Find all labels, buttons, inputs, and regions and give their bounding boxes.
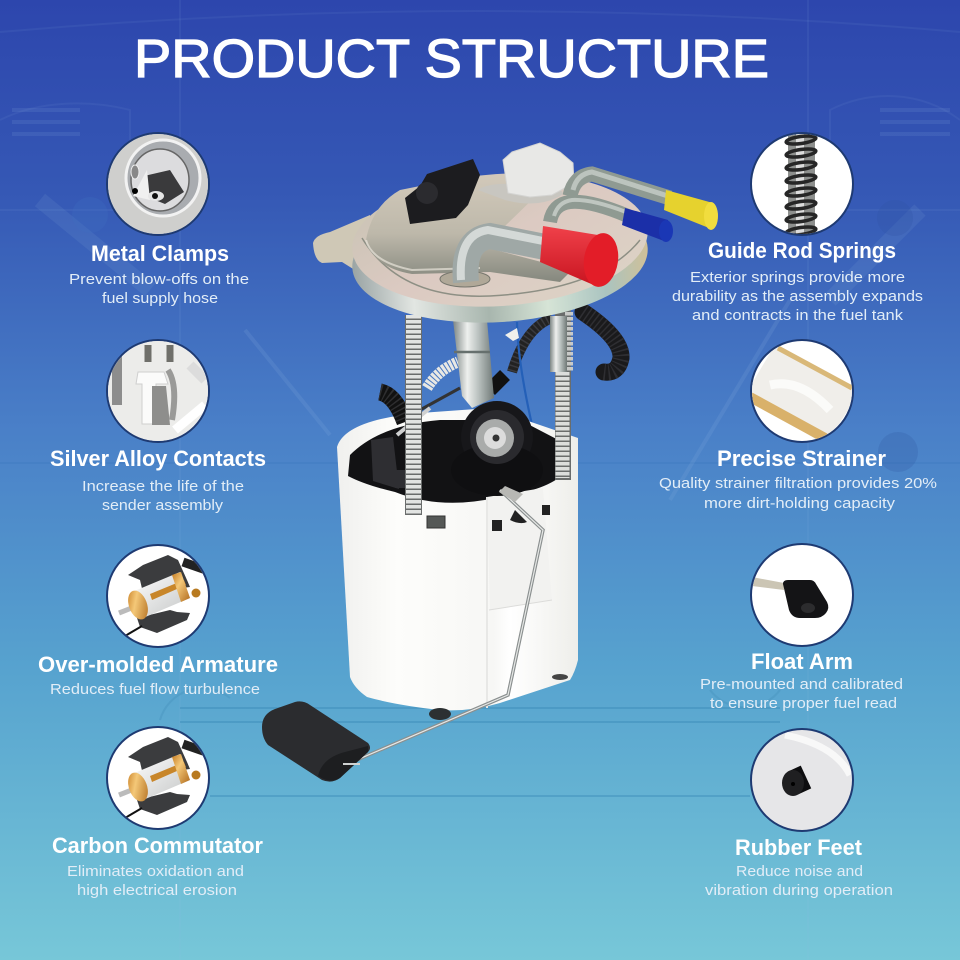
- description: [69, 271, 249, 307]
- feature: guide rod springs: [672, 133, 923, 324]
- thumbnail: contacts: [107, 340, 209, 442]
- description: Eliminates oxidation and: [67, 863, 244, 880]
- heading: Metal Clamps: [91, 241, 229, 266]
- feature: over-molded armature: [38, 545, 278, 698]
- feature: rubber feet: [705, 729, 893, 899]
- feature: silver alloy contacts: [50, 340, 266, 514]
- description: more dirt-holding capacity: [704, 495, 896, 512]
- description: [82, 478, 244, 514]
- thumbnail: rubber foot: [751, 729, 853, 831]
- description: high electrical erosion: [77, 882, 237, 899]
- thumbnail: armature: [107, 545, 209, 647]
- white fuel cup: [337, 408, 578, 720]
- feature: precise strainer: [659, 340, 937, 512]
- feature: float arm: [700, 544, 903, 712]
- description: fuel supply hose: [102, 290, 218, 307]
- description: Pre-mounted and calibrated: [700, 676, 903, 693]
- yellow capped pipe: [570, 172, 718, 230]
- blue capped pipe: [550, 200, 673, 242]
- rear hoses and wires: [420, 312, 621, 458]
- fuel pump assembly: [262, 143, 718, 782]
- heading: Guide Rod Springs: [708, 238, 896, 263]
- feature: carbon commutator: [52, 727, 263, 899]
- guide rods and central pipe: [405, 310, 571, 515]
- heading: Over-molded Armature: [38, 652, 278, 677]
- description: [67, 863, 244, 899]
- heading: Precise Strainer: [717, 446, 886, 471]
- electrical connector: [405, 159, 480, 224]
- thumbnail: float: [751, 544, 853, 646]
- description: vibration during operation: [705, 882, 893, 899]
- thumbnail: commutator: [107, 727, 209, 829]
- heading: Silver Alloy Contacts: [50, 446, 266, 471]
- raised pan: [366, 175, 572, 282]
- description: Reduce noise and: [736, 863, 863, 880]
- feature: metal clamps: [69, 133, 249, 307]
- description: [659, 475, 937, 512]
- heading: Float Arm: [751, 649, 853, 674]
- description: [705, 863, 893, 899]
- description: sender assembly: [102, 497, 224, 514]
- float arm: [345, 486, 543, 765]
- description: to ensure proper fuel read: [710, 695, 897, 712]
- thumbnail: strainer: [750, 339, 854, 443]
- description: durability as the assembly expands: [672, 288, 923, 305]
- heading: Rubber Feet: [735, 835, 863, 860]
- description: Reduces fuel flow turbulence: [50, 681, 260, 698]
- thumbnail: metal clamp: [107, 133, 209, 235]
- title: PRODUCT STRUCTURE: [134, 29, 769, 89]
- float: [262, 701, 370, 782]
- description: and contracts in the fuel tank: [692, 307, 904, 324]
- description: Quality strainer filtration provides 20%: [659, 475, 937, 492]
- description: Increase the life of the: [82, 478, 244, 495]
- description: Prevent blow-offs on the: [69, 271, 249, 288]
- thumbnail: spring: [751, 133, 853, 237]
- mounting flange: [313, 164, 652, 332]
- description: [700, 676, 903, 712]
- pump head: [380, 392, 543, 496]
- red capped pipe: [461, 226, 622, 289]
- heading: Carbon Commutator: [52, 833, 263, 858]
- white cap: [503, 143, 574, 197]
- description: Exterior springs provide more: [690, 269, 905, 286]
- description: [672, 269, 923, 324]
